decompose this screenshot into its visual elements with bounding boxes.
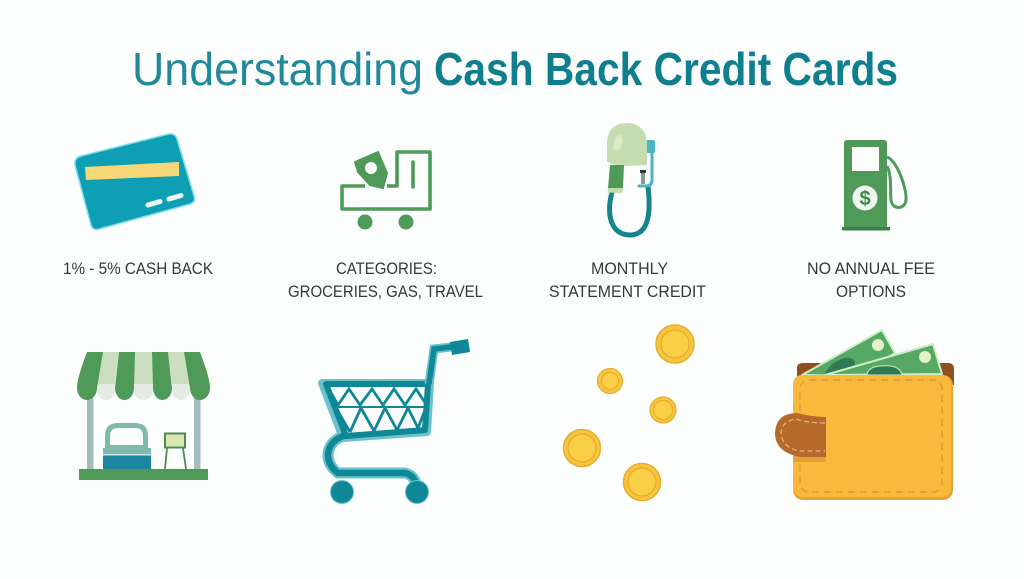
banknotes [802,330,942,376]
icon: shopping cart [322,339,470,504]
clasp [775,413,826,462]
sign stand [165,434,186,469]
title: Understanding [132,43,423,95]
label: monthly statement credit [549,259,706,301]
label: categories [288,259,483,301]
icon: fuel pump: $ [859,188,871,210]
label: categories: GROCERIES, GAS, TRAVEL [288,282,483,301]
title: Cash Back Credit Cards [434,43,898,95]
icon: category tag and cart [342,152,430,230]
icon: gold coins [564,325,694,500]
icon: wallet with cash [775,330,954,500]
label: monthly statement credit: MONTHLY [591,259,668,278]
label: no annual fee: NO ANNUAL FEE [807,259,935,278]
icon: storefront [77,352,210,480]
title [132,43,898,95]
label: categories: CATEGORIES: [336,259,437,278]
icon: fuel nozzle with hose [607,123,655,235]
label: no annual fee: OPTIONS [836,282,906,301]
icon: credit card [75,134,194,230]
register [103,423,151,470]
label: no annual fee [807,259,935,301]
label: monthly statement credit: STATEMENT CREDIT [549,282,706,301]
label: cash back: 1% - 5% CASH BACK [63,259,214,278]
icon: fuel pump [842,140,906,230]
